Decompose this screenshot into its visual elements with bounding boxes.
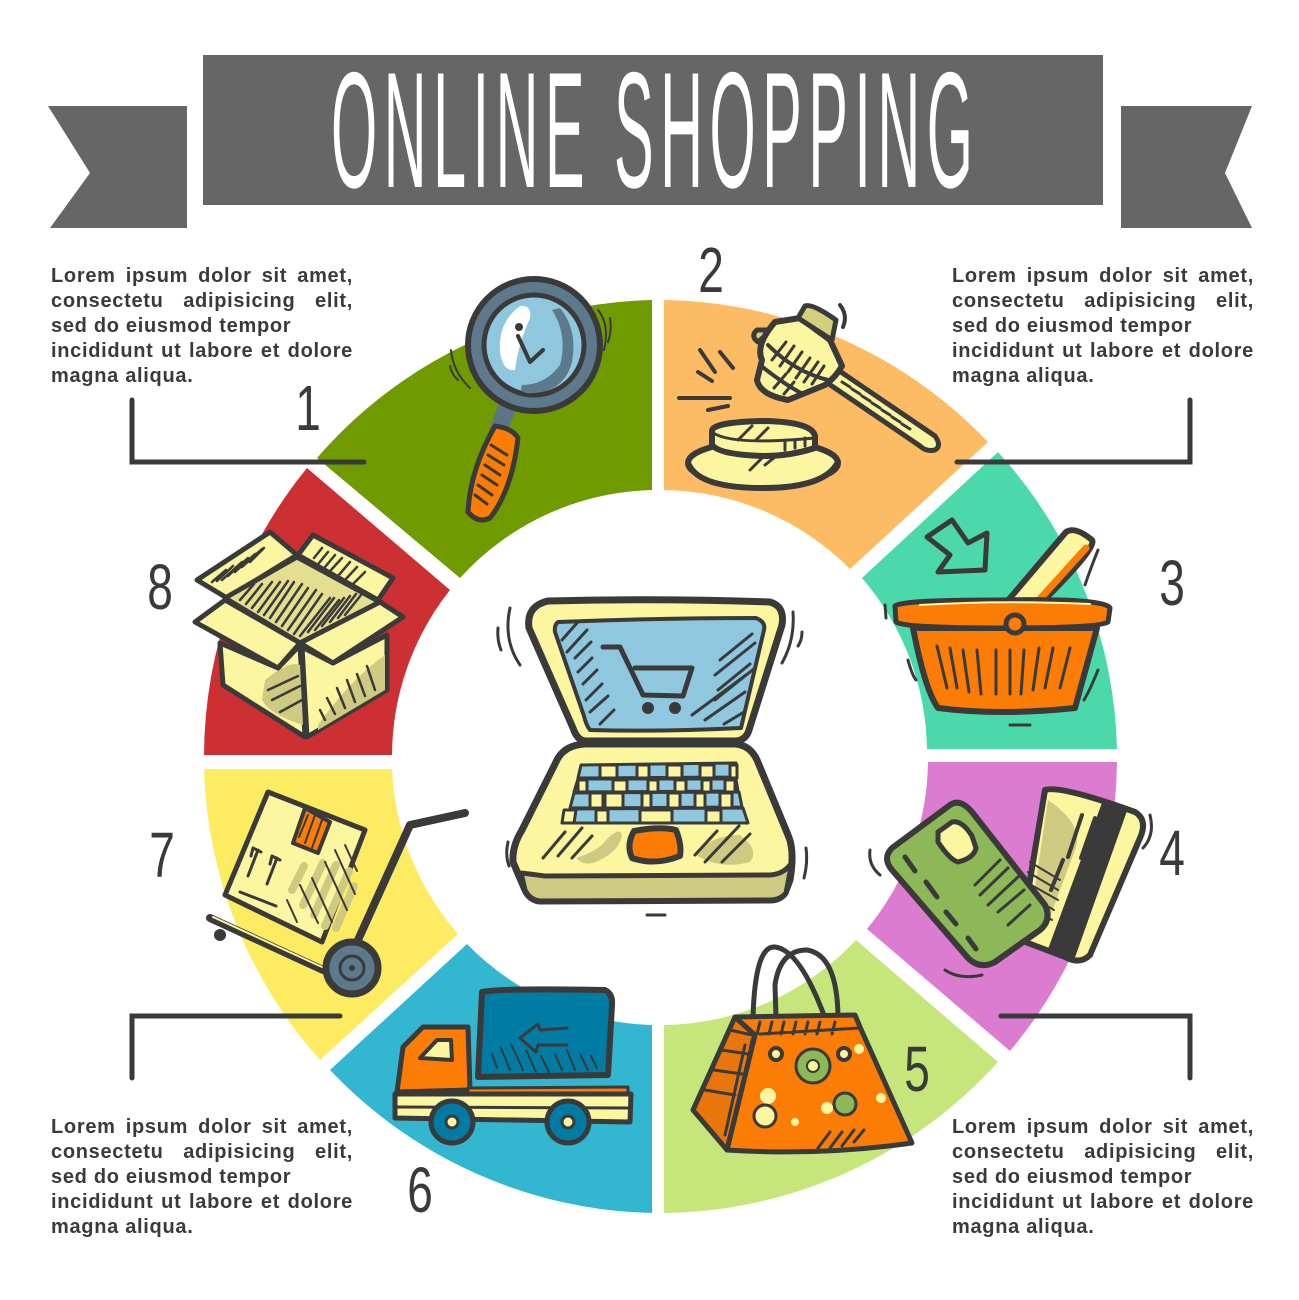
- laptop base: [513, 744, 792, 901]
- text block bottom left: consectetu adipisicing elit,: [51, 1141, 353, 1163]
- segment 3 teal: [862, 452, 1117, 749]
- title: ONLINE SHOPPING: [331, 39, 979, 223]
- icon: magnifying glass: [450, 279, 611, 520]
- leader line top left: [132, 400, 364, 462]
- text block bottom right: incididunt ut labore et dolore: [952, 1191, 1254, 1213]
- banner panel: [203, 55, 1103, 205]
- text block top right: incididunt ut labore et dolore: [952, 340, 1254, 362]
- icon: hand trolley with parcel: [210, 792, 465, 994]
- number 3: 3: [1159, 548, 1185, 619]
- keyboard: [562, 763, 748, 823]
- segment 6 blue: [330, 944, 652, 1213]
- icon: gavel and coins: [679, 305, 938, 488]
- right ribbon tail: [1121, 106, 1252, 228]
- icon: delivery truck: [395, 989, 631, 1143]
- text block top left: Lorem ipsum dolor sit amet,: [51, 265, 353, 287]
- number 8: 8: [147, 552, 173, 623]
- laptop screen: [555, 618, 764, 731]
- segment 4 purple: [867, 762, 1117, 1051]
- text block top left: sed do eiusmod tempor: [51, 315, 291, 337]
- number 2: 2: [698, 235, 724, 306]
- leader line top right: [957, 400, 1190, 462]
- segment 2 orange: [664, 300, 988, 569]
- leader line bottom left: [132, 1016, 340, 1078]
- leader line bottom right: [1001, 1016, 1190, 1078]
- text block bottom left: magna aliqua.: [51, 1216, 193, 1238]
- text block top right: [952, 265, 1254, 387]
- text block bottom left: sed do eiusmod tempor: [51, 1166, 291, 1188]
- text block bottom left: incididunt ut labore et dolore: [51, 1191, 353, 1213]
- text block top left: incididunt ut labore et dolore: [51, 340, 353, 362]
- number 7: 7: [149, 820, 175, 891]
- segment 8 red: [204, 468, 450, 755]
- icon: open cardboard box: [195, 532, 403, 737]
- title banner: [48, 39, 1252, 228]
- text block top left: consectetu adipisicing elit,: [51, 290, 353, 312]
- icon: central laptop with cart: [498, 600, 807, 915]
- number 5: 5: [904, 1034, 930, 1105]
- step numbers: [147, 235, 1185, 1226]
- icon: shopping basket: [885, 520, 1110, 725]
- text block top right: consectetu adipisicing elit,: [952, 290, 1254, 312]
- text block bottom left: Lorem ipsum dolor sit amet,: [51, 1116, 353, 1138]
- text block top left: magna aliqua.: [51, 365, 193, 387]
- segment 5 lime: [664, 940, 998, 1213]
- text block bottom right: magna aliqua.: [952, 1216, 1094, 1238]
- cart on screen: [603, 647, 692, 696]
- segment 7 yellow: [204, 769, 458, 1060]
- text block top right: sed do eiusmod tempor: [952, 315, 1192, 337]
- text block bottom right: sed do eiusmod tempor: [952, 1166, 1192, 1188]
- text block bottom right: consectetu adipisicing elit,: [952, 1141, 1254, 1163]
- icon: credit cards: [870, 789, 1151, 977]
- text block top left: [51, 265, 353, 387]
- left ribbon tail: [48, 106, 187, 228]
- laptop lid: [529, 600, 782, 741]
- text block bottom right: [952, 1116, 1254, 1238]
- number 4: 4: [1159, 818, 1185, 889]
- text block bottom right: Lorem ipsum dolor sit amet,: [952, 1116, 1254, 1138]
- number 6: 6: [407, 1155, 433, 1226]
- text block top right: Lorem ipsum dolor sit amet,: [952, 265, 1254, 287]
- text block bottom left: [51, 1116, 353, 1238]
- icon: shopping bag: [693, 947, 912, 1152]
- ring of eight step segments: [204, 300, 1117, 1213]
- segment 1 green: [317, 300, 652, 578]
- touchpad: [629, 828, 680, 862]
- text block top right: magna aliqua.: [952, 365, 1094, 387]
- number 1: 1: [295, 373, 321, 444]
